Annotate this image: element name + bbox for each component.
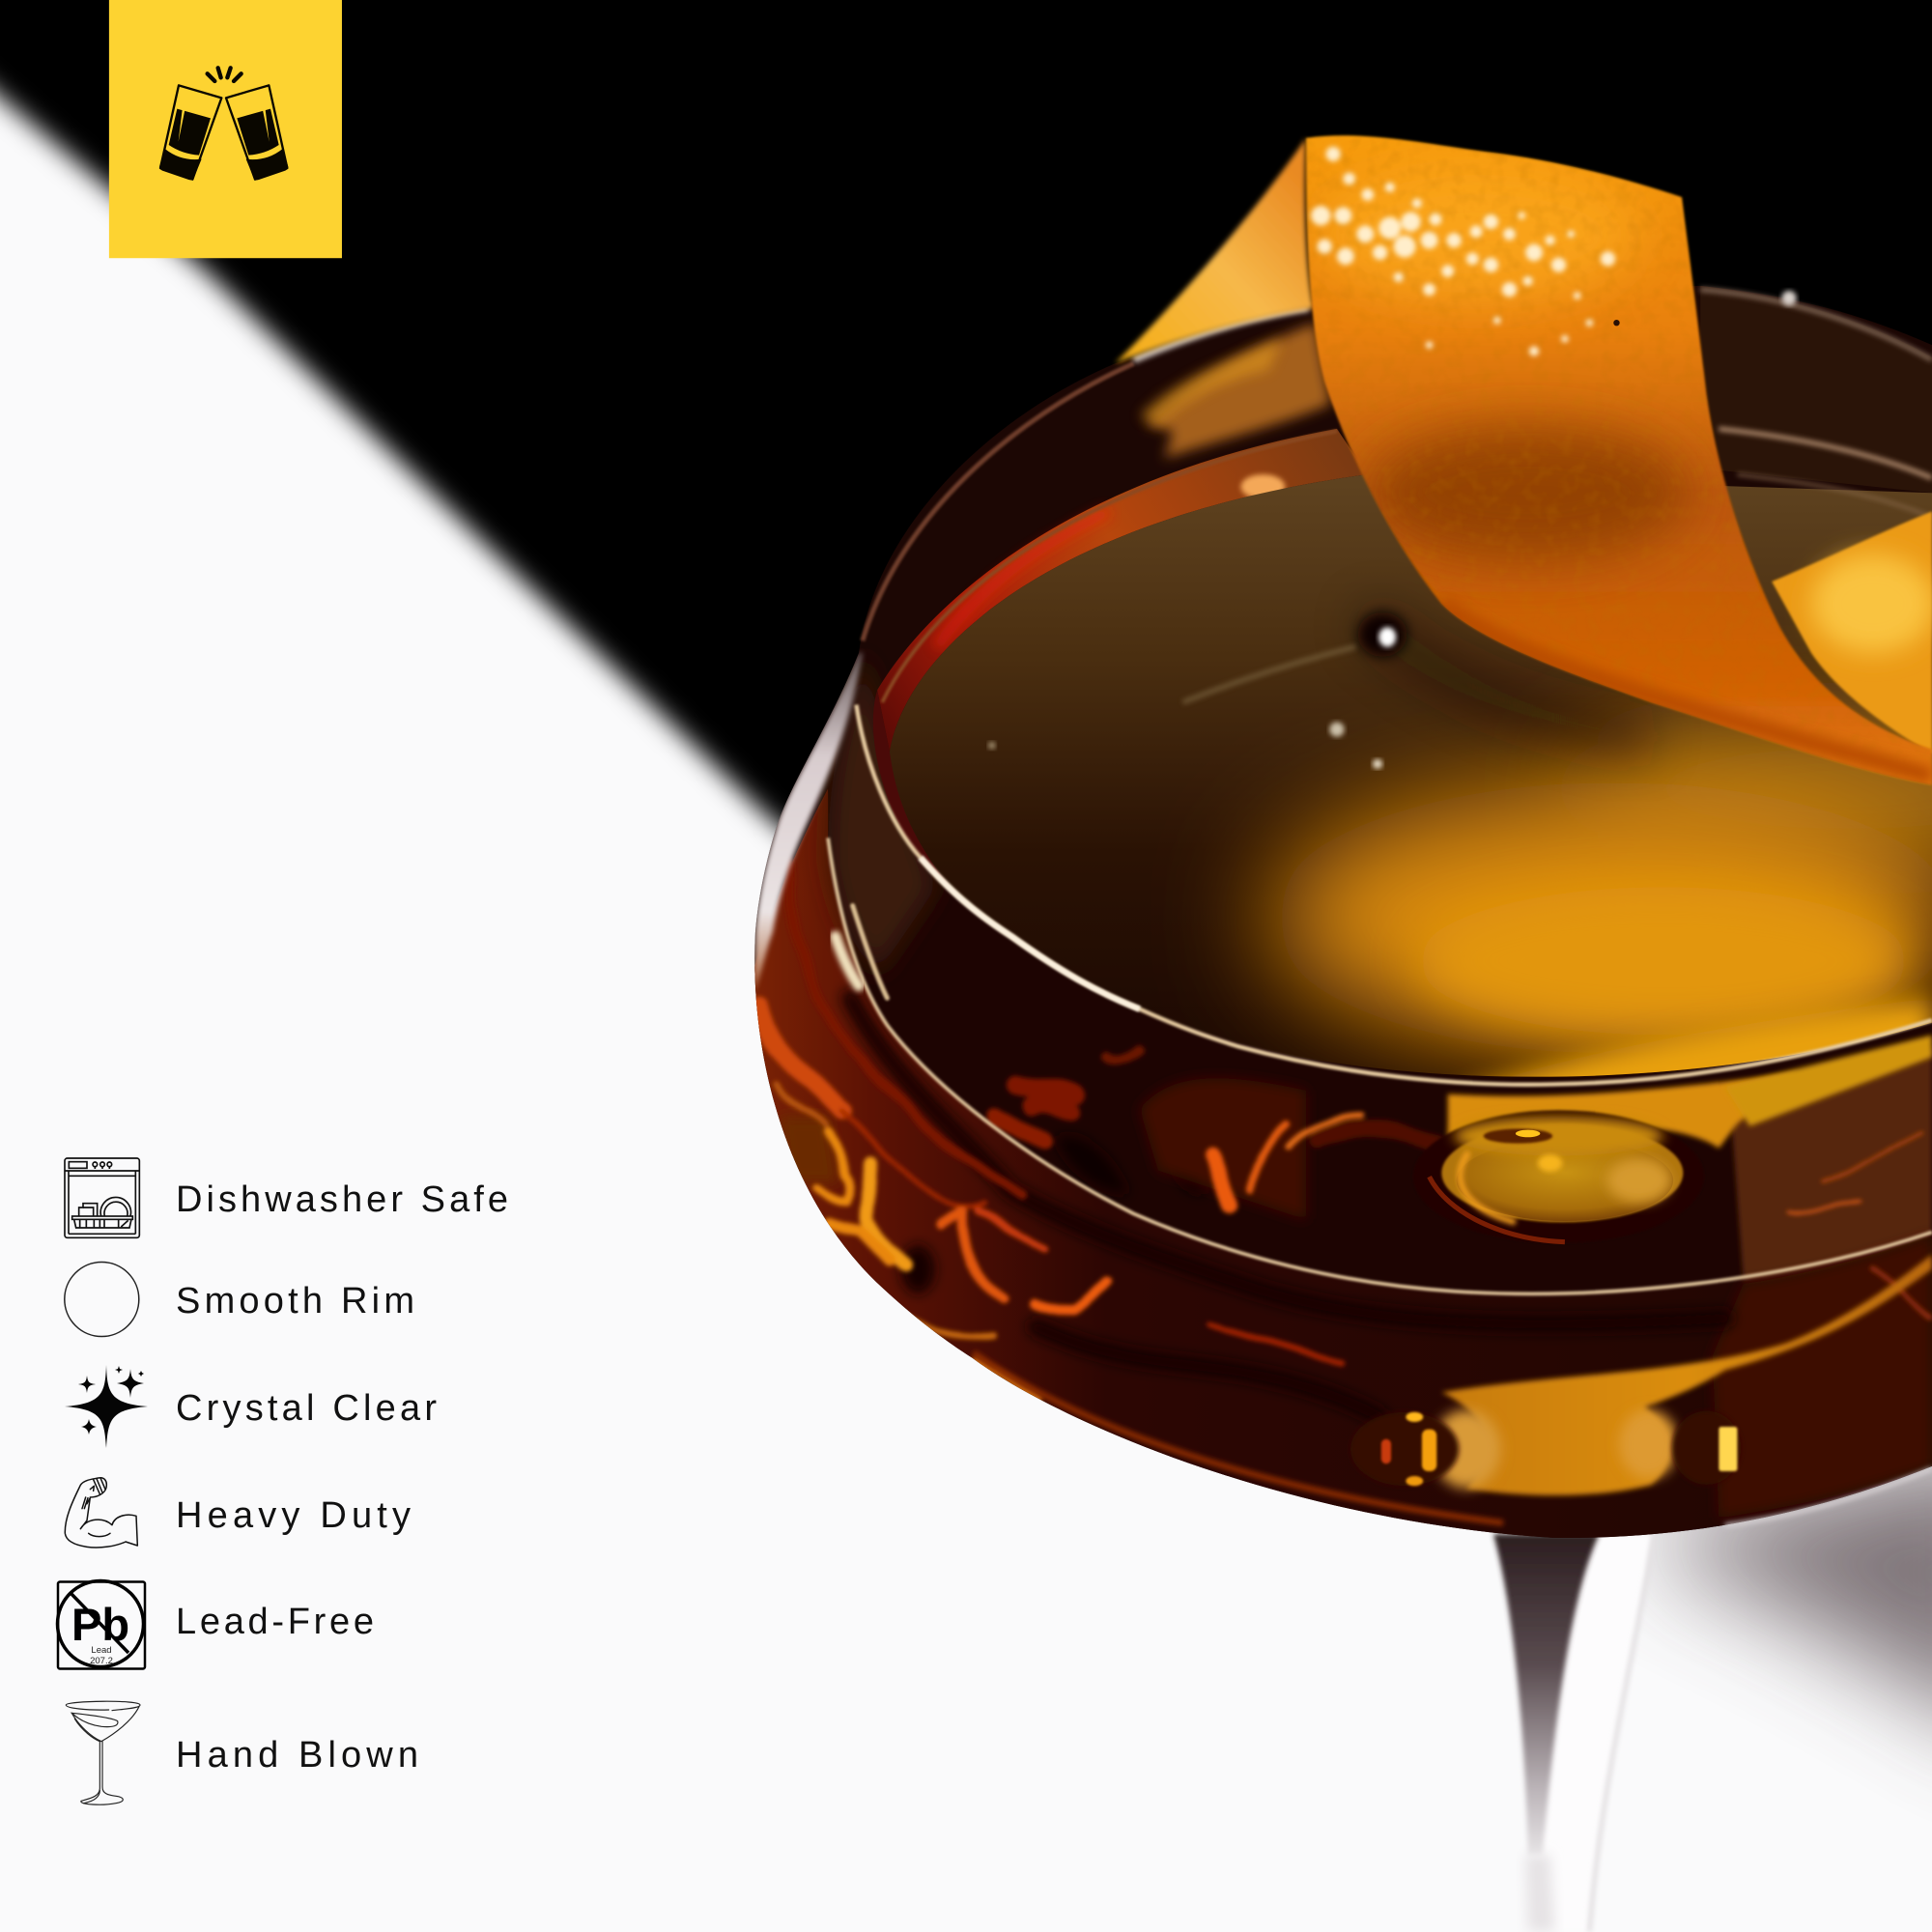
second rim line xyxy=(828,838,1932,1293)
icon: no lead: Lead xyxy=(91,1645,112,1656)
label: dishwasher safe: Dishwasher Safe xyxy=(176,1179,508,1220)
top rim left xyxy=(863,363,1133,640)
base highlights left xyxy=(1350,1412,1459,1486)
peel: back left piece xyxy=(1115,138,1314,363)
icon: no lead: Pb xyxy=(71,1599,129,1650)
icon: no lead: 207.2 xyxy=(90,1656,113,1666)
lower amber reflection xyxy=(1441,1254,1932,1495)
peel: main twist xyxy=(1306,135,1932,784)
red wall right side xyxy=(1731,1047,1932,1282)
label: hand blown: Hand Blown xyxy=(176,1735,418,1776)
icon: flexed arm xyxy=(65,1478,137,1548)
feature: heavy duty xyxy=(65,1478,411,1548)
lower body colour xyxy=(746,788,1932,1552)
right shot glass xyxy=(226,85,288,180)
background: soft shadow at lower right xyxy=(1658,1441,1932,1749)
feature: lead-free xyxy=(58,1580,374,1669)
clear edge streaks xyxy=(836,936,859,985)
glass bowl: dark body xyxy=(739,271,1932,1552)
clink sparks xyxy=(208,68,242,81)
upper wall right of peel xyxy=(1700,286,1932,493)
label: heavy duty: Heavy Duty xyxy=(176,1495,411,1536)
wall between second rim and liquid rim xyxy=(828,788,829,789)
reflection of peel in rim xyxy=(1146,323,1331,458)
peel: bright skin highlights xyxy=(1311,147,1615,356)
soft dark streaks xyxy=(850,998,1725,1417)
surface glint bubble xyxy=(988,612,1407,769)
base highlights right xyxy=(1667,1410,1729,1485)
soft red patches xyxy=(779,1078,1306,1220)
glass stem xyxy=(1493,1534,1654,1932)
base dome xyxy=(1426,1108,1671,1155)
left shot glass xyxy=(159,85,221,180)
clear glass interior tint xyxy=(828,653,936,974)
label: crystal clear: Crystal Clear xyxy=(176,1388,437,1429)
clear glass outer strip xyxy=(754,653,863,992)
feature: smooth rim xyxy=(65,1262,414,1337)
icon: sparkles xyxy=(65,1365,148,1448)
label: lead-free: Lead-Free xyxy=(176,1602,374,1642)
swirls of reflected orange xyxy=(760,863,1932,1400)
orange peel xyxy=(1115,124,1932,788)
feature: hand blown xyxy=(66,1701,418,1804)
bottom warm rim xyxy=(974,1353,1503,1523)
icon: dishwasher xyxy=(65,1158,139,1237)
liquid surface xyxy=(863,456,1932,1109)
icon: no lead xyxy=(58,1580,145,1669)
top rim right xyxy=(1700,290,1932,359)
amber above base dome xyxy=(1448,1072,1799,1149)
front rim around liquid xyxy=(856,705,1932,1085)
golden spot on wall xyxy=(1240,474,1285,499)
feature: crystal clear xyxy=(65,1365,437,1448)
red wall behind liquid xyxy=(877,429,1368,752)
feature: dishwasher safe xyxy=(65,1158,508,1237)
background: black diagonal shadow xyxy=(0,0,1932,985)
icon: circle rim xyxy=(65,1262,139,1337)
label: smooth rim: Smooth Rim xyxy=(176,1281,414,1321)
logo tile xyxy=(109,0,342,258)
icon: martini glass outline xyxy=(66,1701,140,1804)
rim highlights xyxy=(828,290,1932,1525)
peel: right lower piece xyxy=(1772,511,1932,754)
